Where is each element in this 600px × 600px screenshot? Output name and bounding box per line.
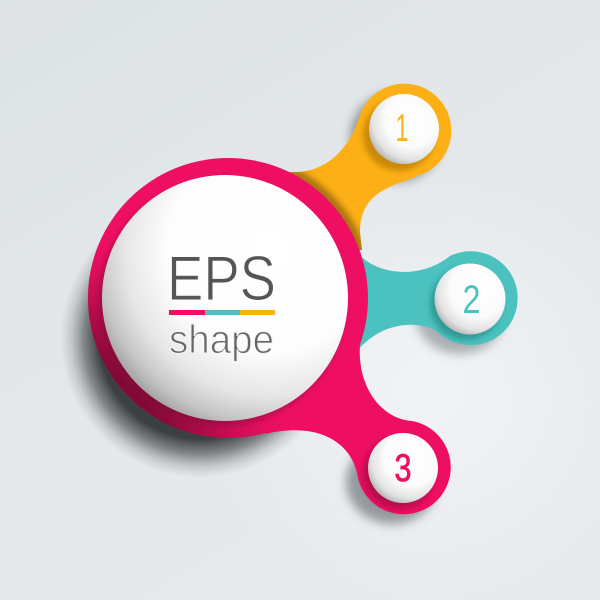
node 3 ball [368, 433, 438, 503]
node 1 ball [369, 94, 439, 164]
main pink circle with connector to node 3 [88, 158, 451, 514]
colour bar [169, 310, 275, 315]
big white ball [98, 175, 348, 426]
number 1: 1 [396, 107, 408, 150]
shadow of pink circle on yellow connector [290, 171, 362, 250]
subtitle: shape: shape [169, 318, 274, 362]
title: EPS: EPS [167, 244, 276, 314]
node 2 ball [434, 264, 506, 334]
number 2: 2 [462, 278, 480, 322]
big circle drop shadow [60, 198, 340, 478]
pink rim shading [88, 158, 368, 438]
connector and circle: node 1 yellow [290, 84, 451, 250]
connector and circle: node 3 pink [265, 340, 451, 514]
node shadows [346, 92, 504, 524]
ball inner shadows on coloured rings [363, 99, 502, 509]
connector and circle: node 2 teal [355, 250, 518, 350]
number 3: 3 [394, 447, 412, 490]
